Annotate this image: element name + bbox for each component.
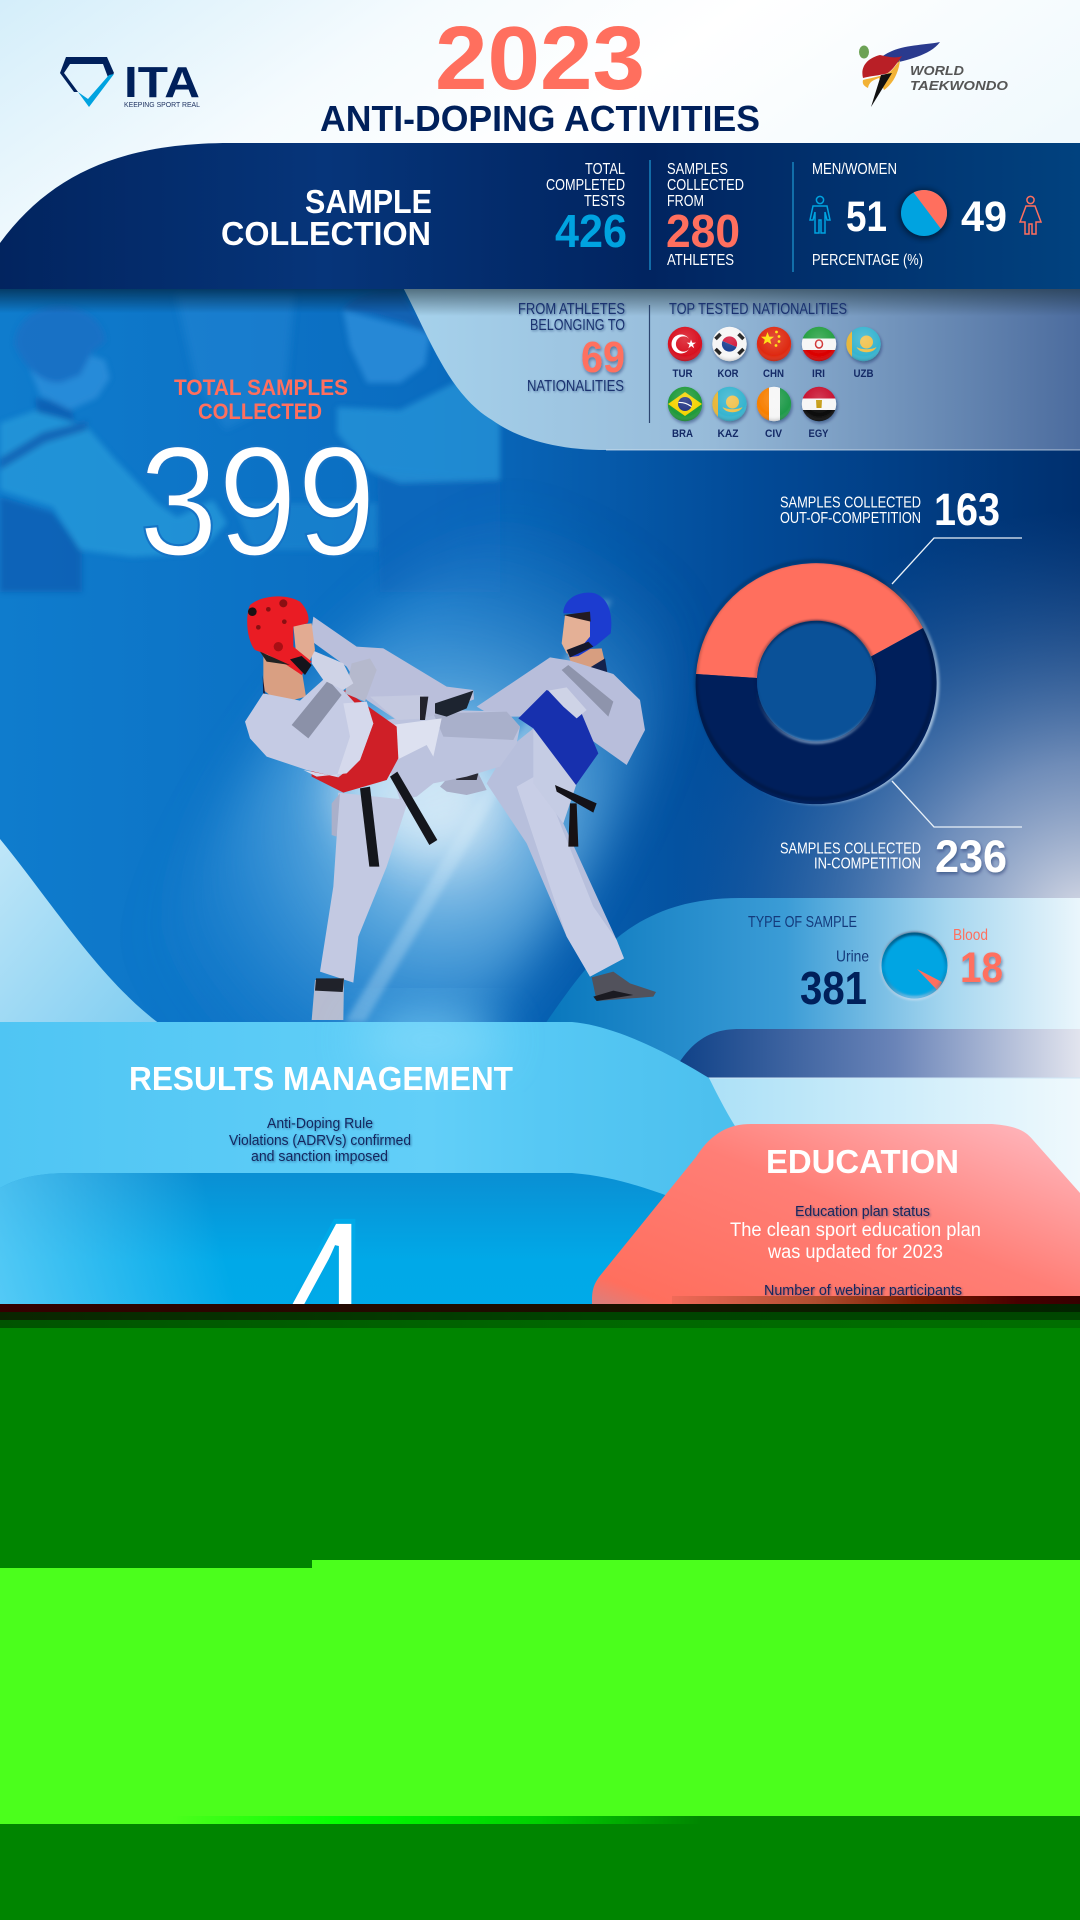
icon: man <box>810 196 830 233</box>
heading: total samples collected <box>174 375 348 424</box>
dark band under type of sample <box>670 1029 1080 1078</box>
flag: Korea <box>712 326 748 362</box>
heading: education: EDUCATION <box>766 1143 959 1180</box>
logo: ITA <box>60 57 200 109</box>
panel: nationalities <box>404 289 1080 450</box>
stat: men and women percentage: 51 <box>846 193 887 241</box>
label: out-of-competition <box>780 484 1000 535</box>
main photo background <box>0 285 1080 1292</box>
stat: men and women percentage: MEN/WOMEN <box>812 161 897 178</box>
pie: urine and blood <box>880 932 948 1000</box>
inner panel: ADRV count <box>0 1168 668 1445</box>
stat: samples collected from athletes: FROM <box>667 193 704 210</box>
stat: men and women percentage: PERCENTAGE (%) <box>812 252 923 269</box>
label: in-competition: IN-COMPETITION <box>814 856 921 872</box>
stat: total completed tests: COMPLETED <box>546 177 625 194</box>
heading: results management: RESULTS MANAGEMENT <box>129 1060 513 1097</box>
stat: total completed tests <box>546 161 627 257</box>
illustration: two taekwondo athletes kicking <box>245 593 656 1020</box>
heading: sample collection: COLLECTION <box>221 215 431 252</box>
athlete: blue <box>440 593 656 1001</box>
text: from athletes: BELONGING TO <box>530 317 625 334</box>
corrupted colour bands covering the lower page <box>0 1296 1080 1920</box>
stat: samples collected from athletes: COLLECTED <box>667 177 744 194</box>
stat: urine: 381 <box>800 962 867 1014</box>
flag labels: CIV <box>765 428 783 440</box>
stat: samples collected from athletes: ATHLETES <box>667 252 734 269</box>
text: education plan status: The clean sport education plan <box>730 1220 981 1241</box>
heading: sample collection: SAMPLE <box>305 183 432 220</box>
pie: men women split <box>899 189 950 239</box>
stat: blood: 18 <box>960 944 1003 992</box>
title: 2023: 2023 <box>435 9 645 109</box>
number: 69 nationalities: 69 <box>581 333 625 382</box>
panel: education <box>592 1124 1080 1320</box>
text: ADRV description: Violations (ADRVs) confirmed <box>229 1132 411 1149</box>
flag labels: CHN <box>763 368 784 380</box>
stat: blood <box>953 927 1003 992</box>
logo: World Taekwondo: TAEKWONDO <box>910 78 1008 93</box>
number: 4: 4 <box>268 1168 378 1445</box>
flag: Ivory Coast <box>756 386 792 422</box>
text: from athletes: FROM ATHLETES <box>518 301 625 318</box>
label: out-of-competition: 163 <box>934 484 1000 535</box>
lower light background <box>600 1078 1080 1318</box>
flag: Egypt <box>801 386 837 422</box>
icon: woman <box>1020 196 1041 234</box>
logo: World Taekwondo <box>859 42 1008 107</box>
title: anti-doping activities: ANTI-DOPING ACTIVITIES <box>320 98 760 139</box>
lower-left light wave <box>0 839 160 1024</box>
segment: out-of-competition 163 <box>696 563 923 678</box>
flag: Uzbekistan label position (Kazakhstan style) <box>846 326 882 362</box>
heading: sample collection <box>221 183 432 252</box>
logo: ITA: KEEPING SPORT REAL <box>124 102 200 109</box>
text: webinar participants: Number of webinar participants <box>764 1282 962 1299</box>
label: out-of-competition: SAMPLES COLLECTED <box>780 494 921 512</box>
flag: Iran <box>801 326 837 362</box>
flag: Turkey <box>667 326 703 362</box>
flag: Kazakhstan <box>712 386 748 422</box>
heading: type of sample: TYPE OF SAMPLE <box>748 914 857 931</box>
segment: in-competition 236 <box>696 628 937 804</box>
text: ADRV description <box>229 1115 411 1165</box>
stat: samples collected from athletes <box>666 161 744 269</box>
heading: total samples collected: COLLECTED <box>198 399 322 424</box>
label: in-competition: SAMPLES COLLECTED <box>780 840 921 858</box>
flag labels: IRI <box>812 368 825 380</box>
text: ADRV description: Anti-Doping Rule <box>267 1115 373 1132</box>
athlete: red <box>245 596 520 1020</box>
flag: Brazil <box>667 386 703 422</box>
stat: samples collected from athletes: SAMPLES <box>667 161 728 178</box>
heading: top tested nationalities: TOP TESTED NATIONALITIES <box>669 301 847 318</box>
logo: ITA: ITA <box>124 58 200 107</box>
flag labels: BRA <box>672 428 693 440</box>
light burst <box>20 408 780 1292</box>
flag labels: KAZ <box>718 428 739 440</box>
header background <box>0 0 1080 300</box>
label: in-competition: 236 <box>935 831 1007 882</box>
text: education plan status: was updated for 2023 <box>767 1242 943 1263</box>
text: from athletes: NATIONALITIES <box>527 378 624 395</box>
stat: men and women percentage: 49 <box>961 193 1007 241</box>
number: 399: 399 <box>139 415 376 589</box>
heading: total samples collected: TOTAL SAMPLES <box>174 375 348 400</box>
text: education plan status: Education plan status <box>795 1203 930 1220</box>
text: from athletes <box>518 301 625 395</box>
stat: total completed tests: TOTAL <box>585 161 625 178</box>
flag labels: EGY <box>808 428 829 440</box>
text: ADRV description: and sanction imposed <box>251 1148 388 1165</box>
stat: blood: Blood <box>953 927 988 944</box>
stat: samples collected from athletes: 280 <box>666 205 740 257</box>
panel: type of sample <box>545 898 1080 1078</box>
flag labels: UZB <box>854 368 874 380</box>
panel: results management <box>0 1014 780 1445</box>
flag labels <box>672 368 874 440</box>
stat: urine: Urine <box>836 948 869 966</box>
flag: China <box>756 326 792 362</box>
text: education plan status <box>730 1203 981 1263</box>
flag labels: KOR <box>718 368 739 380</box>
label: in-competition <box>780 831 1007 882</box>
ghost athletes <box>0 290 500 592</box>
flag labels: TUR <box>672 368 693 380</box>
leader lines <box>892 538 1022 827</box>
stat: total completed tests: 426 <box>555 205 627 257</box>
stat: men and women percentage <box>810 161 1041 269</box>
stat: total completed tests: TESTS <box>584 193 625 210</box>
logo: World Taekwondo: WORLD <box>910 63 965 78</box>
panel: sample collection band <box>0 143 1080 289</box>
chart: samples collected donut <box>696 561 940 805</box>
label: out-of-competition: OUT-OF-COMPETITION <box>780 510 921 527</box>
